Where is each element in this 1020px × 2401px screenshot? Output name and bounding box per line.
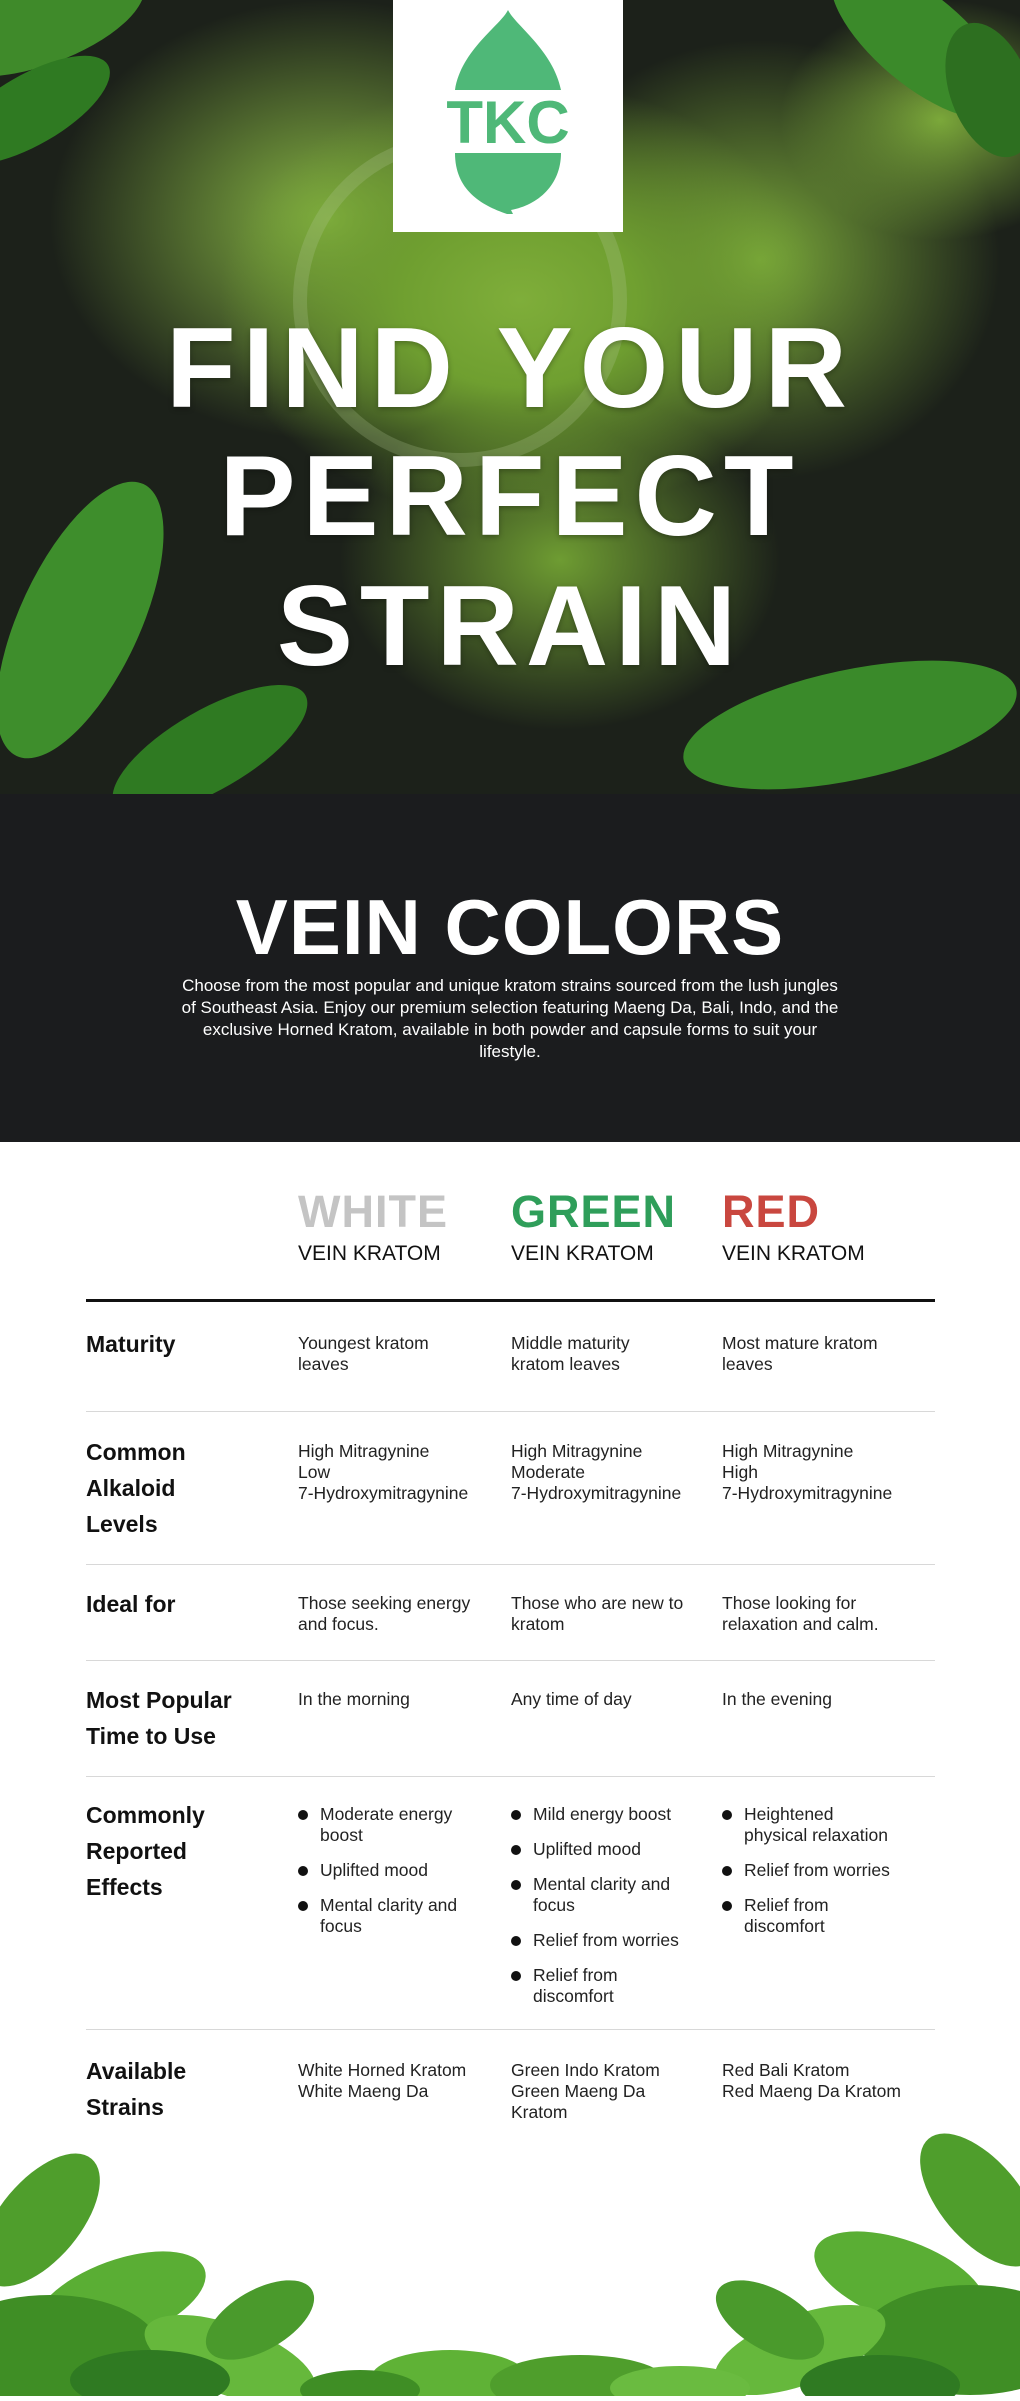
row: available strains: Red Maeng Da Kratom xyxy=(722,2081,901,2101)
title: PERFECT xyxy=(219,433,801,560)
row: alkaloid levels: Common xyxy=(86,1439,186,1465)
title: FIND YOUR xyxy=(166,305,854,432)
row: alkaloid levels: High Mitragynine xyxy=(722,1441,853,1461)
row: maturity: kratom leaves xyxy=(511,1354,620,1374)
logo: TKC xyxy=(446,89,570,156)
row: alkaloid levels: High xyxy=(722,1462,758,1482)
leaf top-right xyxy=(807,0,1020,169)
leaf top-left xyxy=(0,0,159,185)
ring xyxy=(300,140,620,460)
row: maturity: Most mature kratom xyxy=(722,1333,878,1353)
title xyxy=(166,305,854,690)
row: maturity: leaves xyxy=(722,1354,773,1374)
column header: white: WHITE xyxy=(298,1186,448,1237)
row: effects: boost xyxy=(320,1825,363,1845)
row: effects xyxy=(86,1802,890,2006)
row: effects: Uplifted mood xyxy=(320,1860,428,1880)
row: ideal for: Those looking for xyxy=(722,1593,856,1613)
row: alkaloid levels: High Mitragynine xyxy=(298,1441,429,1461)
row: effects: focus xyxy=(533,1895,575,1915)
row: effects: Mental clarity and xyxy=(320,1895,457,1915)
row: effects: discomfort xyxy=(744,1916,825,1936)
row: available strains: Green Maeng Da xyxy=(511,2081,645,2101)
row: maturity: Maturity xyxy=(86,1331,175,1357)
row: most popular time: Most Popular xyxy=(86,1687,232,1713)
column header: green: GREEN xyxy=(511,1186,676,1237)
row: effects: Effects xyxy=(86,1874,163,1900)
column header: red xyxy=(722,1186,865,1265)
row: effects: Mild energy boost xyxy=(533,1804,671,1824)
hero background xyxy=(0,0,1020,794)
dark section xyxy=(0,794,1020,1142)
row: effects: physical relaxation xyxy=(744,1825,888,1845)
row: effects: Uplifted mood xyxy=(533,1839,641,1859)
row: available strains: Strains xyxy=(86,2094,164,2120)
row: most popular time: Any time of day xyxy=(511,1689,632,1709)
column header: green: VEIN KRATOM xyxy=(511,1242,654,1265)
row: maturity: leaves xyxy=(298,1354,349,1374)
row: maturity xyxy=(86,1331,878,1374)
column header: white xyxy=(298,1186,448,1265)
row: ideal for xyxy=(86,1591,879,1634)
column header: green xyxy=(511,1186,676,1265)
row: ideal for: Ideal for xyxy=(86,1591,175,1617)
row: available strains: Green Indo Kratom xyxy=(511,2060,660,2080)
row: alkaloid levels xyxy=(86,1439,892,1537)
row: ideal for: relaxation and calm. xyxy=(722,1614,879,1634)
row: available strains: Red Bali Kratom xyxy=(722,2060,849,2080)
row: alkaloid levels: Moderate xyxy=(511,1462,585,1482)
row: ideal for: Those who are new to xyxy=(511,1593,683,1613)
row: effects: focus xyxy=(320,1916,362,1936)
row: alkaloid levels: 7-Hydroxymitragynine xyxy=(722,1483,892,1503)
row: most popular time xyxy=(86,1687,832,1749)
row: alkaloid levels: Levels xyxy=(86,1511,158,1537)
row: maturity: Middle maturity xyxy=(511,1333,630,1353)
column header: white: VEIN KRATOM xyxy=(298,1242,441,1265)
row: available strains: White Maeng Da xyxy=(298,2081,428,2101)
row: ideal for: kratom xyxy=(511,1614,564,1634)
row: effects: Relief from worries xyxy=(744,1860,890,1880)
heading: vein colors: VEIN COLORS xyxy=(236,883,784,971)
row: alkaloid levels: 7-Hydroxymitragynine xyxy=(298,1483,468,1503)
row: alkaloid levels: Alkaloid xyxy=(86,1475,175,1501)
row: effects: Relief from xyxy=(744,1895,829,1915)
row: most popular time: Time to Use xyxy=(86,1723,216,1749)
row: maturity: Youngest kratom xyxy=(298,1333,429,1353)
column header: red: RED xyxy=(722,1186,820,1237)
row: available strains: Kratom xyxy=(511,2102,567,2122)
row: ideal for: Those seeking energy xyxy=(298,1593,470,1613)
row: alkaloid levels: 7-Hydroxymitragynine xyxy=(511,1483,681,1503)
row: effects: Moderate energy xyxy=(320,1804,452,1824)
row: alkaloid levels: Low xyxy=(298,1462,330,1482)
row: effects: Commonly xyxy=(86,1802,205,1828)
row: effects: Relief from xyxy=(533,1965,618,1985)
row: effects: Mental clarity and xyxy=(533,1874,670,1894)
row: effects: Relief from worries xyxy=(533,1930,679,1950)
row: alkaloid levels: High Mitragynine xyxy=(511,1441,642,1461)
row: available strains xyxy=(86,2058,901,2122)
row: most popular time: In the evening xyxy=(722,1689,832,1709)
row: ideal for: and focus. xyxy=(298,1614,379,1634)
intro text: Choose from the most popular and unique kratom strains sourced from the lush jungles of Southeast Asia. Enjoy our premium selection featuring Maeng Da, Bali, Indo, and the exclusive Horned Kratom, available in both powder and capsule forms to suit your lifestyle. xyxy=(182,976,838,1061)
leaf bottom-right xyxy=(672,636,1020,814)
row: effects: Reported xyxy=(86,1838,187,1864)
row: most popular time: In the morning xyxy=(298,1689,410,1709)
row: available strains: White Horned Kratom xyxy=(298,2060,466,2080)
title: STRAIN xyxy=(277,563,743,690)
column header: red: VEIN KRATOM xyxy=(722,1242,865,1265)
bottom foliage xyxy=(0,2134,1020,2396)
row: effects: Heightened xyxy=(744,1804,834,1824)
logo xyxy=(393,0,623,232)
row: effects: discomfort xyxy=(533,1986,614,2006)
leaf left xyxy=(0,459,325,840)
row: available strains: Available xyxy=(86,2058,186,2084)
